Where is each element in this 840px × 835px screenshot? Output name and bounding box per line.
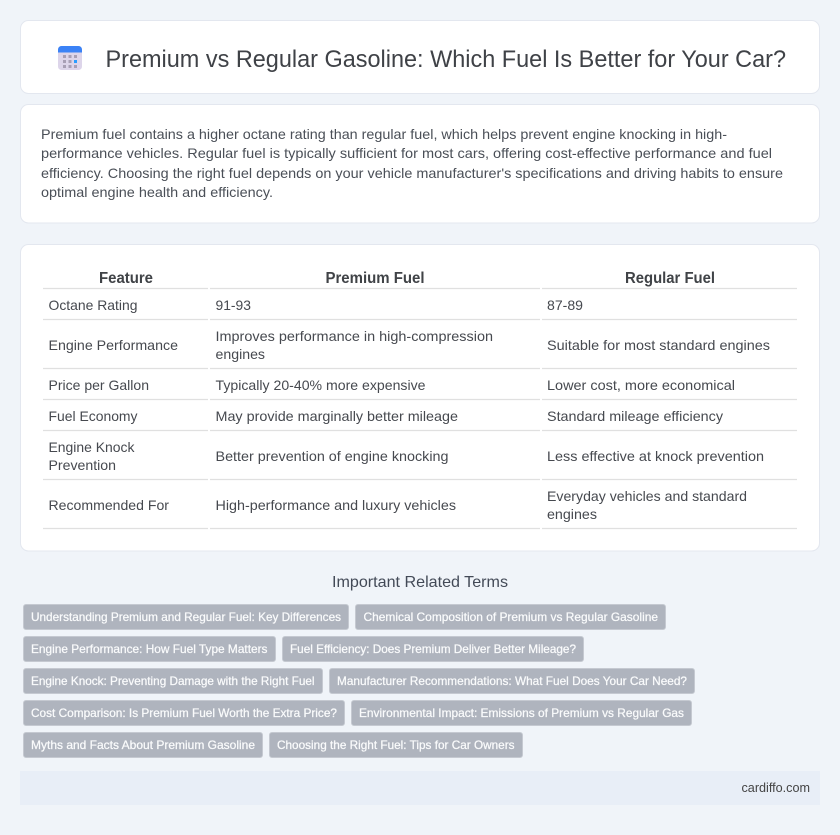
table rules: [43, 288, 797, 528]
tag: Environmental Impact: Emissions of Premium vs Regular Gas: [359, 706, 684, 720]
tag: [24, 636, 276, 662]
tag: [356, 604, 666, 630]
row: engine knock prevention: Engine Knock: [48, 439, 135, 455]
tag: [282, 636, 584, 662]
row: engine performance: Suitable for most standard engines: [547, 337, 770, 353]
related terms tags: [24, 604, 694, 758]
tag: Chemical Composition of Premium vs Regular Gasoline: [364, 610, 658, 624]
row: engine performance: Improves performance in high-compression: [216, 328, 493, 344]
row: recommended for: engines: [547, 506, 597, 522]
tag: Engine Performance: How Fuel Type Matters: [31, 642, 268, 656]
table header row: Premium Fuel: [326, 270, 424, 287]
row: engine performance: engines: [216, 346, 265, 362]
row: recommended for: [48, 488, 747, 522]
row: price per gallon: Lower cost, more economical: [547, 377, 735, 393]
row: octane rating: 87-89: [547, 297, 583, 313]
icon: calendar: [58, 46, 82, 70]
row: engine performance: Engine Performance: [48, 337, 178, 353]
footer bar: [20, 771, 820, 805]
tag: Understanding Premium and Regular Fuel: Key Differences: [31, 610, 341, 624]
row: recommended for: High-performance and luxury vehicles: [216, 497, 456, 513]
intro paragraph: performance vehicles. Regular fuel is typically sufficient for most cars, offering cost-effective performance and fuel: [41, 145, 772, 161]
row: octane rating: [48, 297, 583, 313]
intro paragraph: efficiency. Choosing the right fuel depends on your vehicle manufacturer's specifications and driving habits to ensure: [41, 165, 783, 181]
row: fuel economy: Fuel Economy: [48, 408, 138, 424]
row: recommended for: Recommended For: [48, 497, 169, 513]
row: engine knock prevention: Prevention: [48, 457, 116, 473]
row: recommended for: Everyday vehicles and standard: [547, 488, 747, 504]
panel: comparison table: [20, 244, 820, 551]
row: octane rating: 91-93: [216, 297, 251, 313]
tag: Choosing the Right Fuel: Tips for Car Owners: [277, 738, 514, 752]
row: engine knock prevention: [48, 439, 764, 473]
row: price per gallon: Price per Gallon: [48, 377, 149, 393]
header panel: [20, 20, 820, 94]
tag: [24, 700, 344, 726]
row: fuel economy: May provide marginally better mileage: [216, 408, 458, 424]
row: price per gallon: [48, 377, 735, 393]
tag: [270, 732, 522, 758]
row: octane rating: Octane Rating: [48, 297, 138, 313]
tag: Manufacturer Recommendations: What Fuel Does Your Car Need?: [337, 674, 687, 688]
tag: [24, 732, 262, 758]
table header row: [99, 270, 715, 287]
tag: Myths and Facts About Premium Gasoline: [31, 738, 255, 752]
tag: [24, 668, 322, 694]
table header row: Regular Fuel: [625, 270, 715, 287]
tag: Cost Comparison: Is Premium Fuel Worth the Extra Price?: [31, 706, 337, 720]
row: engine performance: [48, 328, 770, 362]
row: fuel economy: Standard mileage efficiency: [547, 408, 723, 424]
tag: Fuel Efficiency: Does Premium Deliver Better Mileage?: [290, 642, 576, 656]
table header row: Feature: [99, 270, 153, 287]
title: Premium vs Regular Gasoline: Which Fuel Is Better for Your Car?: [106, 46, 786, 73]
heading: important related terms: Important Related Terms: [332, 574, 508, 591]
panel: intro text: [20, 104, 820, 223]
row: engine knock prevention: Better prevention of engine knocking: [216, 448, 448, 464]
row: price per gallon: Typically 20-40% more expensive: [216, 377, 426, 393]
tag: [24, 604, 348, 630]
intro paragraph: [41, 126, 783, 200]
row: fuel economy: [48, 408, 723, 424]
row: engine knock prevention: Less effective at knock prevention: [547, 448, 764, 464]
tag: Engine Knock: Preventing Damage with the Right Fuel: [31, 674, 314, 688]
tag: [352, 700, 692, 726]
tag: [330, 668, 694, 694]
intro paragraph: Premium fuel contains a higher octane rating than regular fuel, which helps prevent engine knocking in high-: [41, 126, 727, 142]
footer credit: cardiffo.com: [742, 781, 810, 795]
intro paragraph: optimal engine health and efficiency.: [41, 184, 273, 200]
